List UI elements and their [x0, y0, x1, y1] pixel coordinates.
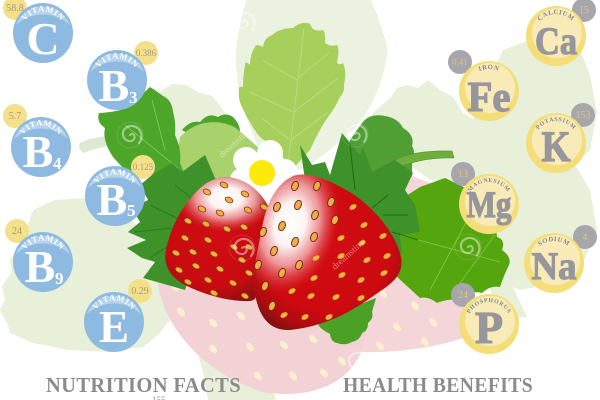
vitamin E badge: E [99, 302, 129, 352]
vitamin E badge [84, 279, 152, 352]
calcium badge: CALCIUM [538, 10, 574, 20]
pale upper-left leaf [160, 84, 262, 180]
vitamin B9 badge: B [25, 241, 55, 292]
ghost strawberries [158, 172, 472, 394]
flower centre [249, 160, 275, 186]
potassium badge: POTASSIUM [536, 117, 576, 130]
vitamin B3 badge: 0.386 [136, 48, 157, 58]
vitamin B4 badge: 4 [53, 154, 62, 173]
sodium badge [524, 225, 597, 293]
potassium badge: K [542, 124, 571, 171]
vitamin B9 badge: 24 [12, 226, 22, 237]
pale right lower leaf [470, 165, 597, 318]
vitamin B9 badge [5, 219, 73, 292]
pale stem left [79, 136, 110, 153]
vitamin B3 badge: VITAMIN [94, 52, 139, 67]
phosphorus badge: P [475, 302, 503, 353]
vitamin B5 badge: VITAMIN [92, 168, 137, 183]
magnesium badge: Mg [466, 185, 512, 226]
pale right upper leaf [470, 40, 597, 172]
vitamin B3 badge: 3 [129, 88, 138, 107]
vitamin B9 badge: VITAMIN [20, 234, 65, 249]
magnesium badge: MAGNESIUM [467, 178, 510, 192]
phosphorus badge: PHOSPHORUS [466, 298, 512, 314]
vitamin E badge: VITAMIN [92, 294, 136, 309]
calyx right [300, 133, 420, 255]
leaf: right small dark [340, 115, 414, 192]
vitamin B5 badge: 0.125 [133, 162, 154, 172]
seeds left [171, 181, 269, 300]
sodium badge: SODIUM [538, 236, 570, 246]
vitamin C badge [3, 0, 73, 64]
title: health benefits: HEALTH BENEFITS [343, 373, 533, 397]
phosphorus badge [451, 283, 519, 354]
magnesium badge [451, 162, 519, 234]
title: nutrition facts: NUTRITION FACTS [46, 373, 241, 397]
strawberry right [253, 174, 401, 330]
vitamin B5 badge [85, 155, 155, 226]
vitamin B4 badge: VITAMIN [18, 120, 63, 134]
ghost strawberry left [158, 240, 372, 394]
vitamin B3 badge [87, 41, 158, 111]
vitamin C badge: 58.8 [6, 3, 24, 14]
vitamin B5 badge: 5 [127, 201, 136, 220]
watermark text: dreamstime [330, 236, 368, 271]
vitamin B9 badge: 9 [55, 269, 64, 288]
vitamin E badge: 0.29 [131, 286, 149, 297]
vitamin B3 badge: B [99, 60, 129, 111]
vitamin C badge: C [26, 13, 60, 64]
leaf: left dark green [98, 87, 187, 180]
ghost strawberry right [345, 172, 472, 352]
pale bottom stem [195, 345, 275, 400]
seeds right [253, 180, 392, 321]
vitamin B4 badge [3, 104, 71, 177]
calcium badge: Ca [535, 20, 577, 63]
leaf: bottom calyx [318, 298, 376, 344]
ghost seeds [169, 281, 439, 382]
potassium badge: 153 [576, 110, 590, 121]
iron badge [448, 50, 519, 121]
calcium badge: 15 [579, 5, 589, 16]
watermark text [217, 124, 368, 271]
leaf: left light green [178, 114, 268, 190]
pale top leaf [236, 0, 388, 170]
iron badge: IRON [478, 64, 500, 71]
watermark text: dreamstime [217, 124, 255, 159]
iron badge: Fe [468, 75, 510, 121]
vitamin B4 badge: B [23, 126, 53, 177]
potassium badge [526, 103, 595, 173]
vitamin B4 badge: 5.7 [9, 111, 21, 122]
calcium badge [526, 0, 596, 66]
pale right middle leaf [367, 80, 480, 185]
leaf: bright green right [392, 178, 510, 303]
iron badge: 0.41 [452, 57, 468, 67]
strawberry left [165, 177, 270, 301]
flower [230, 140, 297, 203]
stem right [394, 151, 454, 169]
sodium badge: Na [532, 245, 576, 288]
pale left leaf [0, 197, 170, 352]
calyx left [127, 155, 222, 290]
magnesium badge: 13 [458, 169, 468, 180]
leaf: central light green [239, 23, 345, 172]
sodium badge: 4 [582, 232, 588, 243]
vitamin C badge: VITAMIN [20, 6, 65, 20]
vitamin B5 badge: B [97, 174, 127, 225]
phosphorus badge: 24 [458, 290, 468, 301]
